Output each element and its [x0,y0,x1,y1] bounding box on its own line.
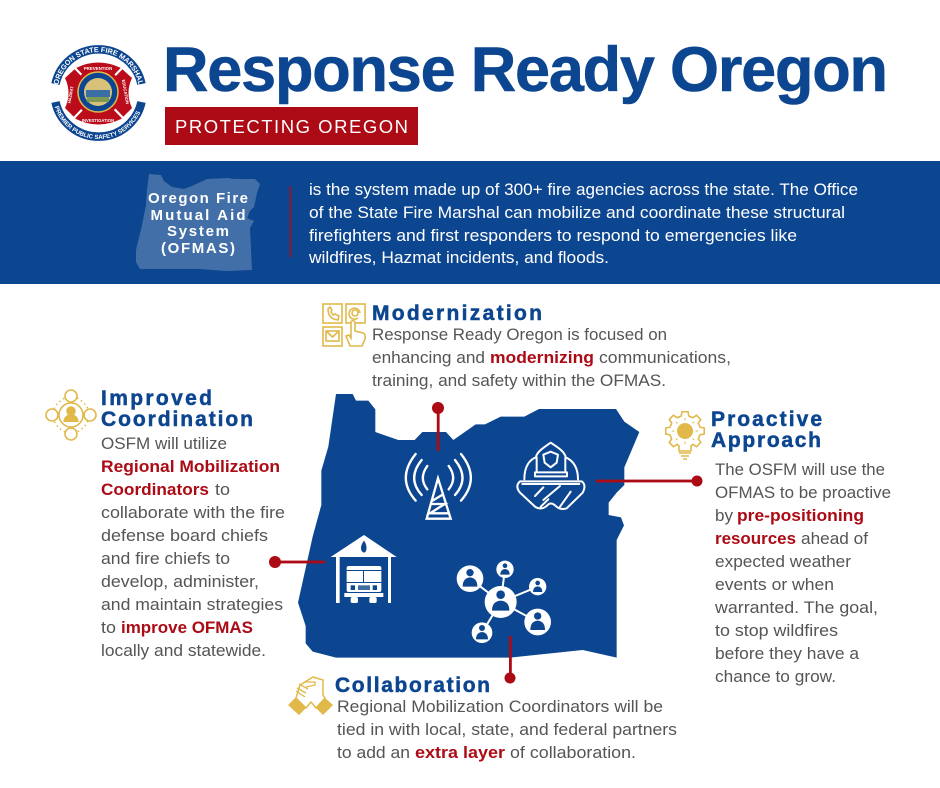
panel: OFMAS definition band [0,161,940,284]
body text [714,461,891,686]
body text: and maintain strategies [101,596,283,614]
OFMAS description: firefighters and first responders to respond to emergencies like [309,227,797,245]
body text [101,435,285,660]
heading: Collaboration [335,674,490,697]
body text: enhancing and [372,349,485,367]
icon: Oregon silhouette with OFMAS label [136,174,260,271]
body text: expected weather [715,553,852,571]
body text: Regional Mobilization [101,458,280,476]
connector: right pin [596,476,702,486]
body text: to stop wildfires [715,622,838,640]
body text: improve OFMAS [121,619,253,637]
body text: warranted. The goal, [714,599,878,617]
body text: and fire chiefs to [101,550,230,568]
body text: OSFM will utilize [101,435,227,453]
body text: before they have a [715,645,860,663]
heading: Improved [101,387,212,410]
logo: Oregon State Fire Marshal seal: PREMIER PUBLIC SAFETY SERVICES [54,106,140,139]
body text: Response Ready Oregon is focused on [372,326,667,344]
logo: Oregon State Fire Marshal seal: EDUCATION [121,79,130,104]
body text: extra layer [415,744,506,762]
body text: develop, administer, [101,573,259,591]
OFMAS description: wildfires, Hazmat incidents, and floods. [308,249,609,267]
OFMAS description [308,181,858,267]
body text: locally and statewide. [101,642,266,660]
logo: Oregon State Fire Marshal seal [51,45,146,141]
icon: communication tiles [323,304,365,346]
logo: Oregon State Fire Marshal seal: INVESTIGATION [82,118,114,123]
connector: top pin [432,402,444,451]
body text: chance to grow. [715,668,836,686]
body text: pre-positioning [737,507,864,525]
logo: Oregon State Fire Marshal seal: HAZMAT [67,85,75,104]
body text [337,698,677,762]
connector: left pin [269,556,325,568]
subtitle banner [165,107,418,145]
body text: training, and safety within the OFMAS. [372,372,666,390]
body text: Regional Mobilization Coordinators will be [337,698,663,716]
connector: bottom pin [504,636,516,684]
body text: The OSFM will use the [715,461,885,479]
body text: to [101,619,116,637]
panel: Improved Coordination [46,387,285,660]
icon: Oregon silhouette with OFMAS label: System [167,223,229,240]
icon: Oregon silhouette with OFMAS label: Mutual Aid [150,207,246,224]
icon: radio tower [406,454,471,519]
panel: Improved Coordination: Coordination [101,408,253,431]
body text: tied in with local, state, and federal partners [337,721,677,739]
OFMAS description: is the system made up of 300+ fire agencies across the state. The Office [309,181,858,199]
body text: resources [715,530,796,548]
body text: of collaboration. [510,744,636,762]
panel: Proactive Approach: Approach [711,429,821,452]
body text: events or when [715,576,834,594]
OFMAS description: of the State Fire Marshal can mobilize and coordinate these structural [309,204,845,222]
body text [372,326,731,390]
subtitle banner: PROTECTING OREGON [175,116,408,137]
body text: to add an [337,744,410,762]
icon: people network [457,561,551,643]
icon: firefighter helmet [517,443,584,509]
body text: communications, [599,349,731,367]
icon: Oregon silhouette with OFMAS label: (OFMAS) [161,240,235,257]
icon: Oregon silhouette with OFMAS label: Oregon Fire [148,190,248,207]
body text: OFMAS to be proactive [715,484,891,502]
logo: Oregon State Fire Marshal seal: OREGON STATE FIRE MARSHAL [54,47,143,85]
icon: clasped hands [288,677,333,715]
body text: Coordinators [101,481,209,499]
icon: gear lightbulb [666,412,704,459]
icon: fire station with engine [331,535,397,603]
body text: to [215,481,230,499]
heading: Proactive [711,408,822,431]
body text: defense board chiefs [101,527,268,545]
panel: Proactive Approach [666,408,891,686]
panel: Collaboration [288,674,677,762]
logo: Oregon State Fire Marshal seal: PREVENTION [84,66,112,71]
icon: coordination network [46,390,96,440]
body text: by [715,507,734,525]
heading: Modernization [372,302,542,325]
body text: ahead of [801,530,868,548]
title: Response Ready Oregon [163,35,888,105]
panel: Oregon map with icons [298,394,639,658]
body text: modernizing [490,349,594,367]
panel: Modernization [323,302,731,390]
body text: collaborate with the fire [101,504,285,522]
